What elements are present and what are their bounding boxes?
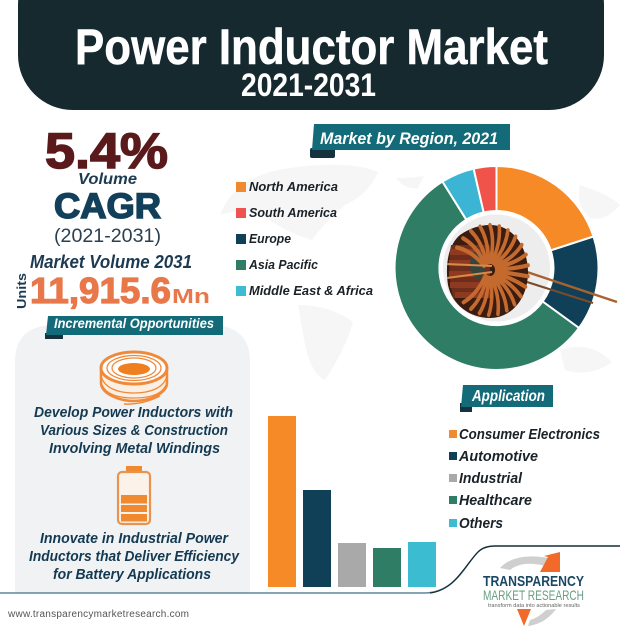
logo: transparency market research: MARKET RESEARCH xyxy=(483,587,584,603)
legend: regions: Middle East & Africa xyxy=(249,283,373,298)
image: toroidal inductor xyxy=(447,225,617,318)
icon: battery xyxy=(118,466,150,524)
legend: applications: Others xyxy=(459,515,503,532)
text: develop power inductors: Involving Metal Windings xyxy=(49,440,220,457)
volume label: Volume xyxy=(78,171,137,188)
subtitle years: 2021-2031 xyxy=(241,67,376,103)
CAGR percentage: 5.4% xyxy=(45,123,168,179)
footer website: www.transparencymarketresearch.com xyxy=(7,609,189,620)
ribbon: incremental opportunities: Incremental Opportunities xyxy=(54,315,214,331)
logo: transparency market research xyxy=(483,552,584,626)
ribbon: market by region xyxy=(310,124,510,158)
market volume xyxy=(14,252,210,311)
text: innovate in industrial power inductors: Innovate in Industrial Power xyxy=(40,530,229,547)
icon: wire coil xyxy=(101,352,167,404)
legend: regions: North America xyxy=(249,179,338,194)
text: innovate in industrial power inductors: Inductors that Deliver Efficiency xyxy=(29,548,240,565)
legend: applications: Healthcare xyxy=(459,492,532,509)
text: develop power inductors xyxy=(34,404,233,457)
legend: regions xyxy=(236,179,373,298)
legend: applications xyxy=(449,426,600,532)
legend: applications: Industrial xyxy=(459,470,523,487)
legend: applications: Automotive xyxy=(458,448,538,465)
units label: Units xyxy=(14,273,29,309)
title: Power Inductor Market xyxy=(75,19,548,75)
legend: regions: Asia Pacific xyxy=(248,257,319,272)
donut chart: market by region xyxy=(395,166,598,370)
market volume value: 11,915.6 xyxy=(30,270,171,311)
legend: regions: Europe xyxy=(249,231,291,246)
CAGR period: (2021-2031) xyxy=(54,226,161,247)
text: innovate in industrial power inductors: for Battery Applications xyxy=(53,566,211,583)
text: develop power inductors: Various Sizes & Construction xyxy=(40,422,228,439)
CAGR statistics xyxy=(45,123,168,247)
logo: transparency market research: TRANSPARENCY xyxy=(483,573,584,590)
text: develop power inductors: Develop Power Inductors with xyxy=(34,404,233,421)
panel: incremental opportunities xyxy=(15,315,250,593)
legend: regions: South America xyxy=(249,205,337,220)
ribbon: application: Application xyxy=(471,388,545,405)
market volume heading: Market Volume 2031 xyxy=(30,252,192,272)
ribbon: application xyxy=(460,385,553,412)
ribbon: market by region: Market by Region, 2021 xyxy=(320,129,498,148)
million unit: Mn xyxy=(172,286,210,308)
legend: applications: Consumer Electronics xyxy=(459,426,600,443)
text: innovate in industrial power inductors xyxy=(29,530,240,583)
title banner xyxy=(18,0,604,110)
bar chart: application xyxy=(268,416,436,587)
logo: transparency market research: transform data into actionable results xyxy=(488,603,581,609)
ribbon: incremental opportunities xyxy=(45,315,223,339)
CAGR label: CAGR xyxy=(54,187,161,226)
